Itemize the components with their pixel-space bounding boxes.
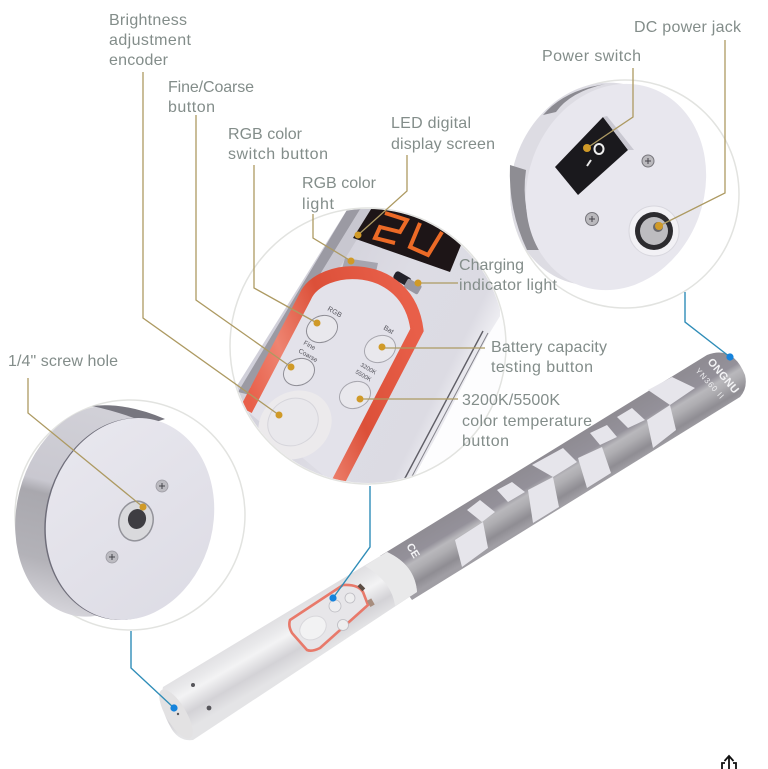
label: Charging indicator light: [459, 257, 558, 294]
leader: screw hole: [28, 378, 143, 507]
wand gray section: [380, 352, 746, 600]
leader: color temperature: [360, 398, 458, 400]
gold anchor dots: [140, 144, 663, 510]
icon: share: [722, 756, 736, 769]
blue anchor dots: [170, 353, 734, 712]
label: RGB color switch button: RGB color: [228, 126, 303, 143]
label: Battery capacity testing button: testing button: [491, 359, 593, 376]
label: Brightness adjustment encoder: [109, 12, 192, 69]
label: 1/4" screw hole: 1/4" screw hole: [8, 353, 118, 370]
leader: RGB switch: [254, 165, 317, 323]
label: RGB color switch button: [228, 126, 328, 163]
label: LED digital display screen: LED digital: [391, 115, 471, 132]
connector: right detail: [685, 292, 730, 357]
disc face: [497, 58, 735, 316]
charging indicator light: [393, 271, 422, 294]
label: Battery capacity testing button: Battery capacity: [491, 339, 607, 356]
button: RGB: RGB: [326, 306, 343, 319]
DC jack: [629, 206, 679, 256]
panel left edge strip: [238, 205, 362, 395]
disc side: [0, 388, 201, 634]
label: Fine/Coarse button: Fine/Coarse: [168, 79, 254, 96]
wand label: brand: ONGNU: [705, 356, 741, 396]
label: Fine/Coarse button: button: [168, 99, 215, 116]
circle outline: right detail: [511, 80, 739, 308]
label: 3200K/5500K color temperature button: 3200K/5500K: [462, 392, 560, 409]
leader: battery testing: [382, 347, 485, 349]
label: Brightness adjustment encoder: encoder: [109, 52, 169, 69]
leader: DC jack: [659, 40, 725, 226]
disc face: [25, 400, 235, 638]
wand small holes: [177, 683, 211, 715]
wand base cap: [153, 685, 199, 743]
leader: brightness encoder: [143, 72, 279, 415]
label: 3200K/5500K color temperature button: color temperature: [462, 413, 592, 430]
label: LED digital display screen: display screen: [391, 136, 495, 153]
red outline loop: [246, 273, 417, 486]
circle outline: center detail: [230, 208, 506, 484]
label: Battery capacity testing button: [491, 339, 607, 376]
label: 3200K/5500K color temperature button: button: [462, 433, 509, 450]
connector: left detail: [131, 631, 174, 708]
wand control panel: [289, 583, 375, 651]
connector lines: blue: [131, 292, 730, 708]
wand label: CE mark: CE: [403, 541, 422, 561]
button: Bat: [364, 325, 396, 364]
leader: power switch: [587, 68, 633, 148]
panel body: [228, 205, 500, 490]
wand silver handle: [162, 552, 417, 740]
small screws: [156, 480, 168, 492]
button: Bat: Bat: [382, 325, 395, 336]
label: DC power jack: DC power jack: [634, 19, 742, 36]
label: Charging indicator light: indicator light: [459, 277, 558, 294]
small screws: [642, 155, 654, 167]
label: Power switch: Power switch: [542, 48, 641, 65]
wand white checker patches: [455, 377, 695, 567]
LED digital display: [353, 205, 463, 272]
label: LED digital display screen: [391, 115, 495, 153]
connector: center detail: [333, 486, 370, 598]
button: 3200K/5500K: 3200K: [359, 363, 377, 376]
button: 3200K/5500K: 5500K: [354, 370, 372, 383]
button: Fine/Coarse: Fine: [302, 340, 317, 352]
label: RGB color light: RGB color: [302, 175, 377, 192]
wand handle collar: [365, 552, 417, 606]
circle outline: left detail: [15, 400, 245, 630]
leader lines: gold: [28, 40, 725, 507]
rocker switch: [555, 116, 634, 195]
label: RGB color switch button: switch button: [228, 146, 328, 163]
disc face edge: [23, 400, 234, 638]
label: 3200K/5500K color temperature button: [462, 392, 592, 450]
button: Fine/Coarse: Coarse: [297, 348, 319, 364]
label: RGB color light: [302, 175, 377, 213]
leader: RGB light: [313, 214, 351, 261]
panel right edge lines: [404, 331, 483, 480]
disc side: [482, 57, 718, 311]
label: Charging indicator light: Charging: [459, 257, 524, 274]
RGB color light: [342, 258, 378, 270]
center detail: control panel close-up: [237, 209, 500, 483]
leader: fine coarse: [196, 115, 291, 367]
label: Brightness adjustment encoder: adjustment: [109, 32, 192, 49]
label: Fine/Coarse button: [168, 79, 254, 116]
leader: charging light: [418, 282, 458, 284]
label: RGB color light: light: [302, 196, 335, 213]
encoder dial: [258, 390, 332, 460]
leader: LED screen: [358, 155, 407, 235]
button: 3200K/5500K: [339, 363, 377, 410]
wand label: model: YN360 II: [694, 366, 726, 401]
left detail: screw hole disc: [0, 388, 235, 638]
button: Fine/Coarse: [283, 340, 318, 386]
label: Brightness adjustment encoder: Brightness: [109, 12, 187, 29]
tripod screw insert: [115, 497, 157, 545]
right detail: power disc: [482, 57, 735, 316]
button: RGB: [306, 306, 342, 344]
wand: LED tube light: [153, 352, 746, 743]
